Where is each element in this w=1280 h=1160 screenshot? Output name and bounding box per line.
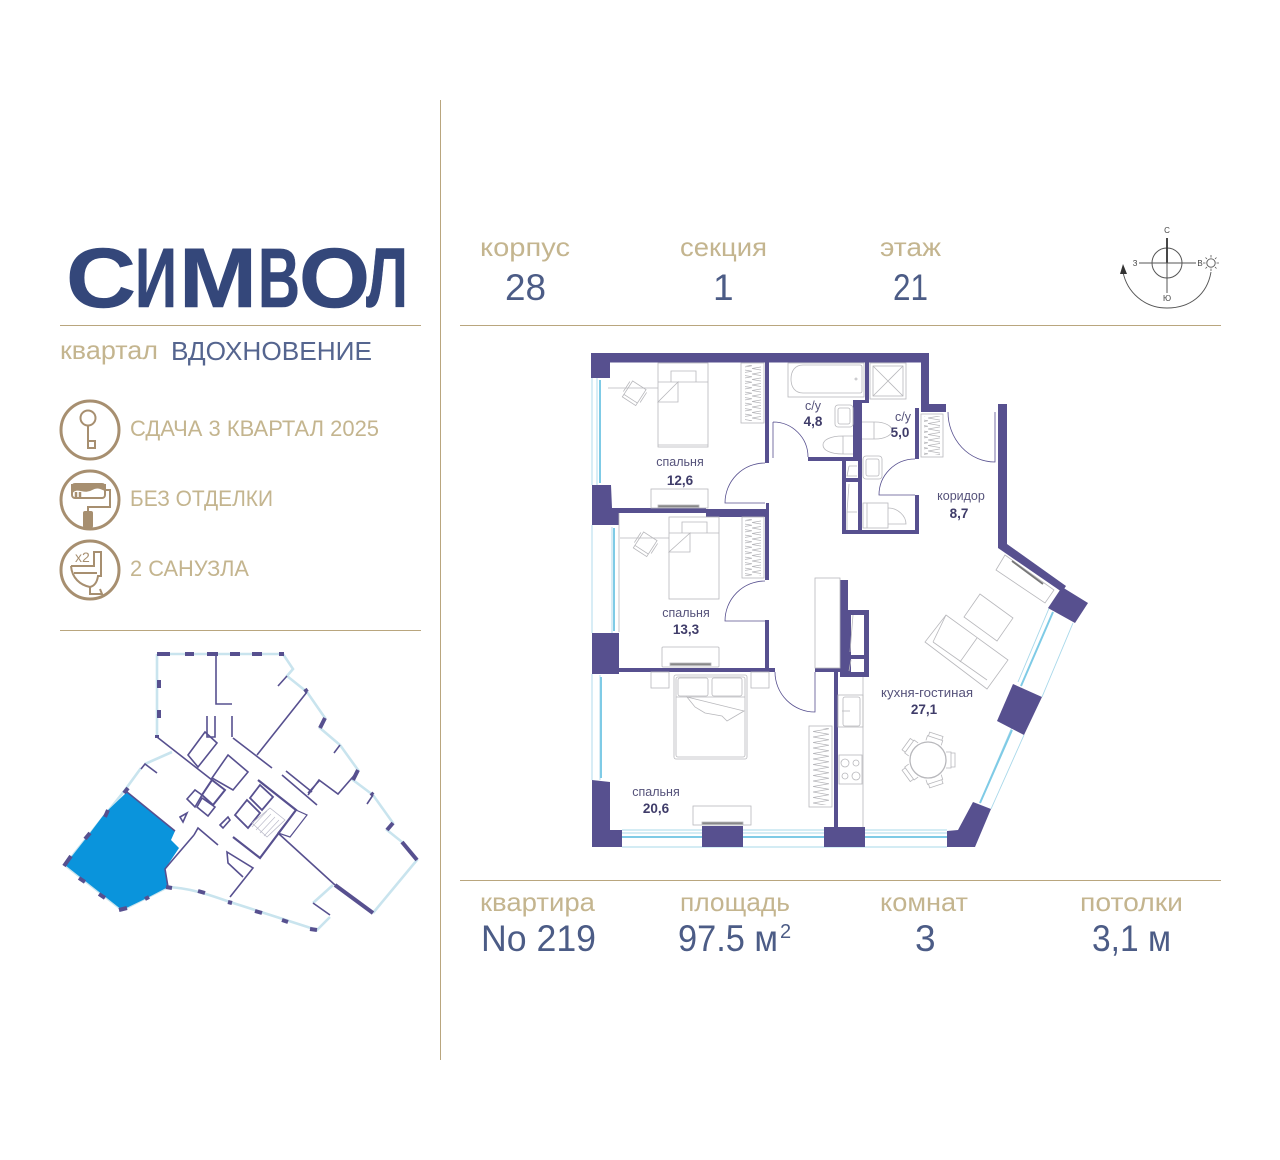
logo: СИМВОЛ: В — [258, 231, 300, 325]
icon: two toilets: x2 — [75, 549, 90, 565]
footer: площадь: 2 — [780, 921, 791, 943]
footer: потолки — [1080, 887, 1183, 959]
subtitle: квартал ВДОХНОВЕНИЕ — [60, 335, 372, 366]
footer: площадь: площадь — [680, 887, 790, 917]
core with stairs — [233, 780, 307, 858]
thick wall segments and piers — [64, 654, 417, 930]
label: спальня 12,6: спальня — [656, 455, 704, 469]
vertical divider — [440, 100, 441, 1060]
label: кухня-гостиная 27,1: 27,1 — [911, 702, 938, 717]
logo: СИМВОЛ — [66, 231, 408, 325]
rule above floor plan — [60, 630, 421, 631]
label: спальня 12,6 — [656, 455, 704, 488]
footer: площадь: 97.5 м — [678, 918, 778, 959]
label: коридор 8,7: 8,7 — [950, 506, 968, 521]
kitchen fixtures — [815, 578, 863, 827]
label: коридор 8,7 — [937, 489, 985, 521]
doors — [725, 412, 995, 712]
text: bathrooms: 2 САНУЗЛА — [130, 556, 249, 581]
rule under logo — [60, 325, 421, 326]
header: корпус: 28 — [505, 267, 546, 308]
label: коридор 8,7: коридор — [937, 489, 985, 503]
logo: СИМВОЛ: М — [179, 231, 257, 325]
logo: СИМВОЛ: О — [299, 231, 370, 325]
label: спальня 13,3: 13,3 — [673, 622, 700, 637]
glazing outline — [65, 654, 417, 930]
label: спальня 20,6 — [632, 785, 680, 816]
label: с/у 4,8: 4,8 — [804, 414, 823, 429]
compass: С — [1164, 226, 1170, 235]
label: спальня 13,3 — [662, 606, 710, 637]
label: с/у 5,0 — [891, 410, 912, 440]
footer: комнат — [880, 887, 968, 959]
subtitle: квартал ВДОХНОВЕНИЕ: ВДОХНОВЕНИЕ — [171, 336, 372, 366]
living room furniture — [901, 555, 1054, 788]
label: с/у 5,0: 5,0 — [891, 425, 909, 440]
icon: paint roller — [61, 471, 119, 529]
label: с/у 4,8: с/у — [805, 399, 822, 413]
footer: потолки: потолки — [1080, 887, 1183, 917]
compass: Ю — [1163, 294, 1171, 303]
rule under header — [460, 325, 1221, 326]
header: этаж — [880, 232, 942, 308]
header: корпус — [480, 232, 570, 308]
compass: В — [1197, 259, 1203, 268]
bathroom fixtures — [788, 363, 943, 671]
header: этаж: этаж — [880, 232, 942, 262]
header: корпус: корпус — [480, 232, 570, 262]
label: кухня-гостиная 27,1: кухня-гостиная — [881, 686, 973, 700]
label: спальня 20,6: 20,6 — [643, 801, 670, 816]
header: этаж: 21 — [893, 267, 928, 308]
bedroom 3 furniture — [651, 672, 832, 825]
label: спальня 12,6: 12,6 — [667, 473, 694, 488]
footer: потолки: 3,1 м — [1092, 918, 1171, 959]
label: с/у 5,0: с/у — [895, 410, 912, 424]
footer: квартира: No 219 — [481, 918, 596, 959]
footer: комнат: 3 — [915, 918, 936, 959]
footer: площадь — [678, 887, 791, 959]
footer: комнат: комнат — [880, 887, 968, 917]
compass: З — [1133, 259, 1138, 268]
header: секция: 1 — [713, 267, 734, 308]
compass — [1120, 226, 1219, 308]
icon: key — [61, 401, 119, 459]
apartment highlight — [65, 792, 179, 910]
piers and thick walls — [591, 353, 1088, 847]
apartment floor plan — [591, 353, 1088, 847]
logo: СИМВОЛ: Л — [366, 231, 408, 325]
subtitle: квартал ВДОХНОВЕНИЕ: квартал — [60, 335, 158, 365]
icon: two toilets — [61, 541, 119, 599]
logo: СИМВОЛ: И — [135, 231, 177, 325]
bedroom 1 furniture — [608, 363, 764, 508]
logo: СИМВОЛ: С — [66, 231, 136, 325]
footer: квартира — [480, 887, 596, 959]
rule above footer — [460, 880, 1221, 881]
label: с/у 4,8 — [804, 399, 823, 429]
structural walls — [127, 653, 373, 915]
footer: квартира: квартира — [480, 887, 596, 917]
label: кухня-гостиная 27,1 — [881, 686, 973, 717]
label: спальня 13,3: спальня — [662, 606, 710, 620]
label: спальня 20,6: спальня — [632, 785, 680, 799]
floor key plan — [64, 653, 417, 930]
header: секция — [680, 232, 767, 308]
bedroom 2 furniture — [619, 513, 764, 667]
text: finish: БЕЗ ОТДЕЛКИ — [130, 486, 273, 511]
text: delivery date: СДАЧА 3 КВАРТАЛ 2025 — [130, 416, 379, 441]
windows — [592, 378, 1073, 847]
header: секция: секция — [680, 232, 767, 262]
